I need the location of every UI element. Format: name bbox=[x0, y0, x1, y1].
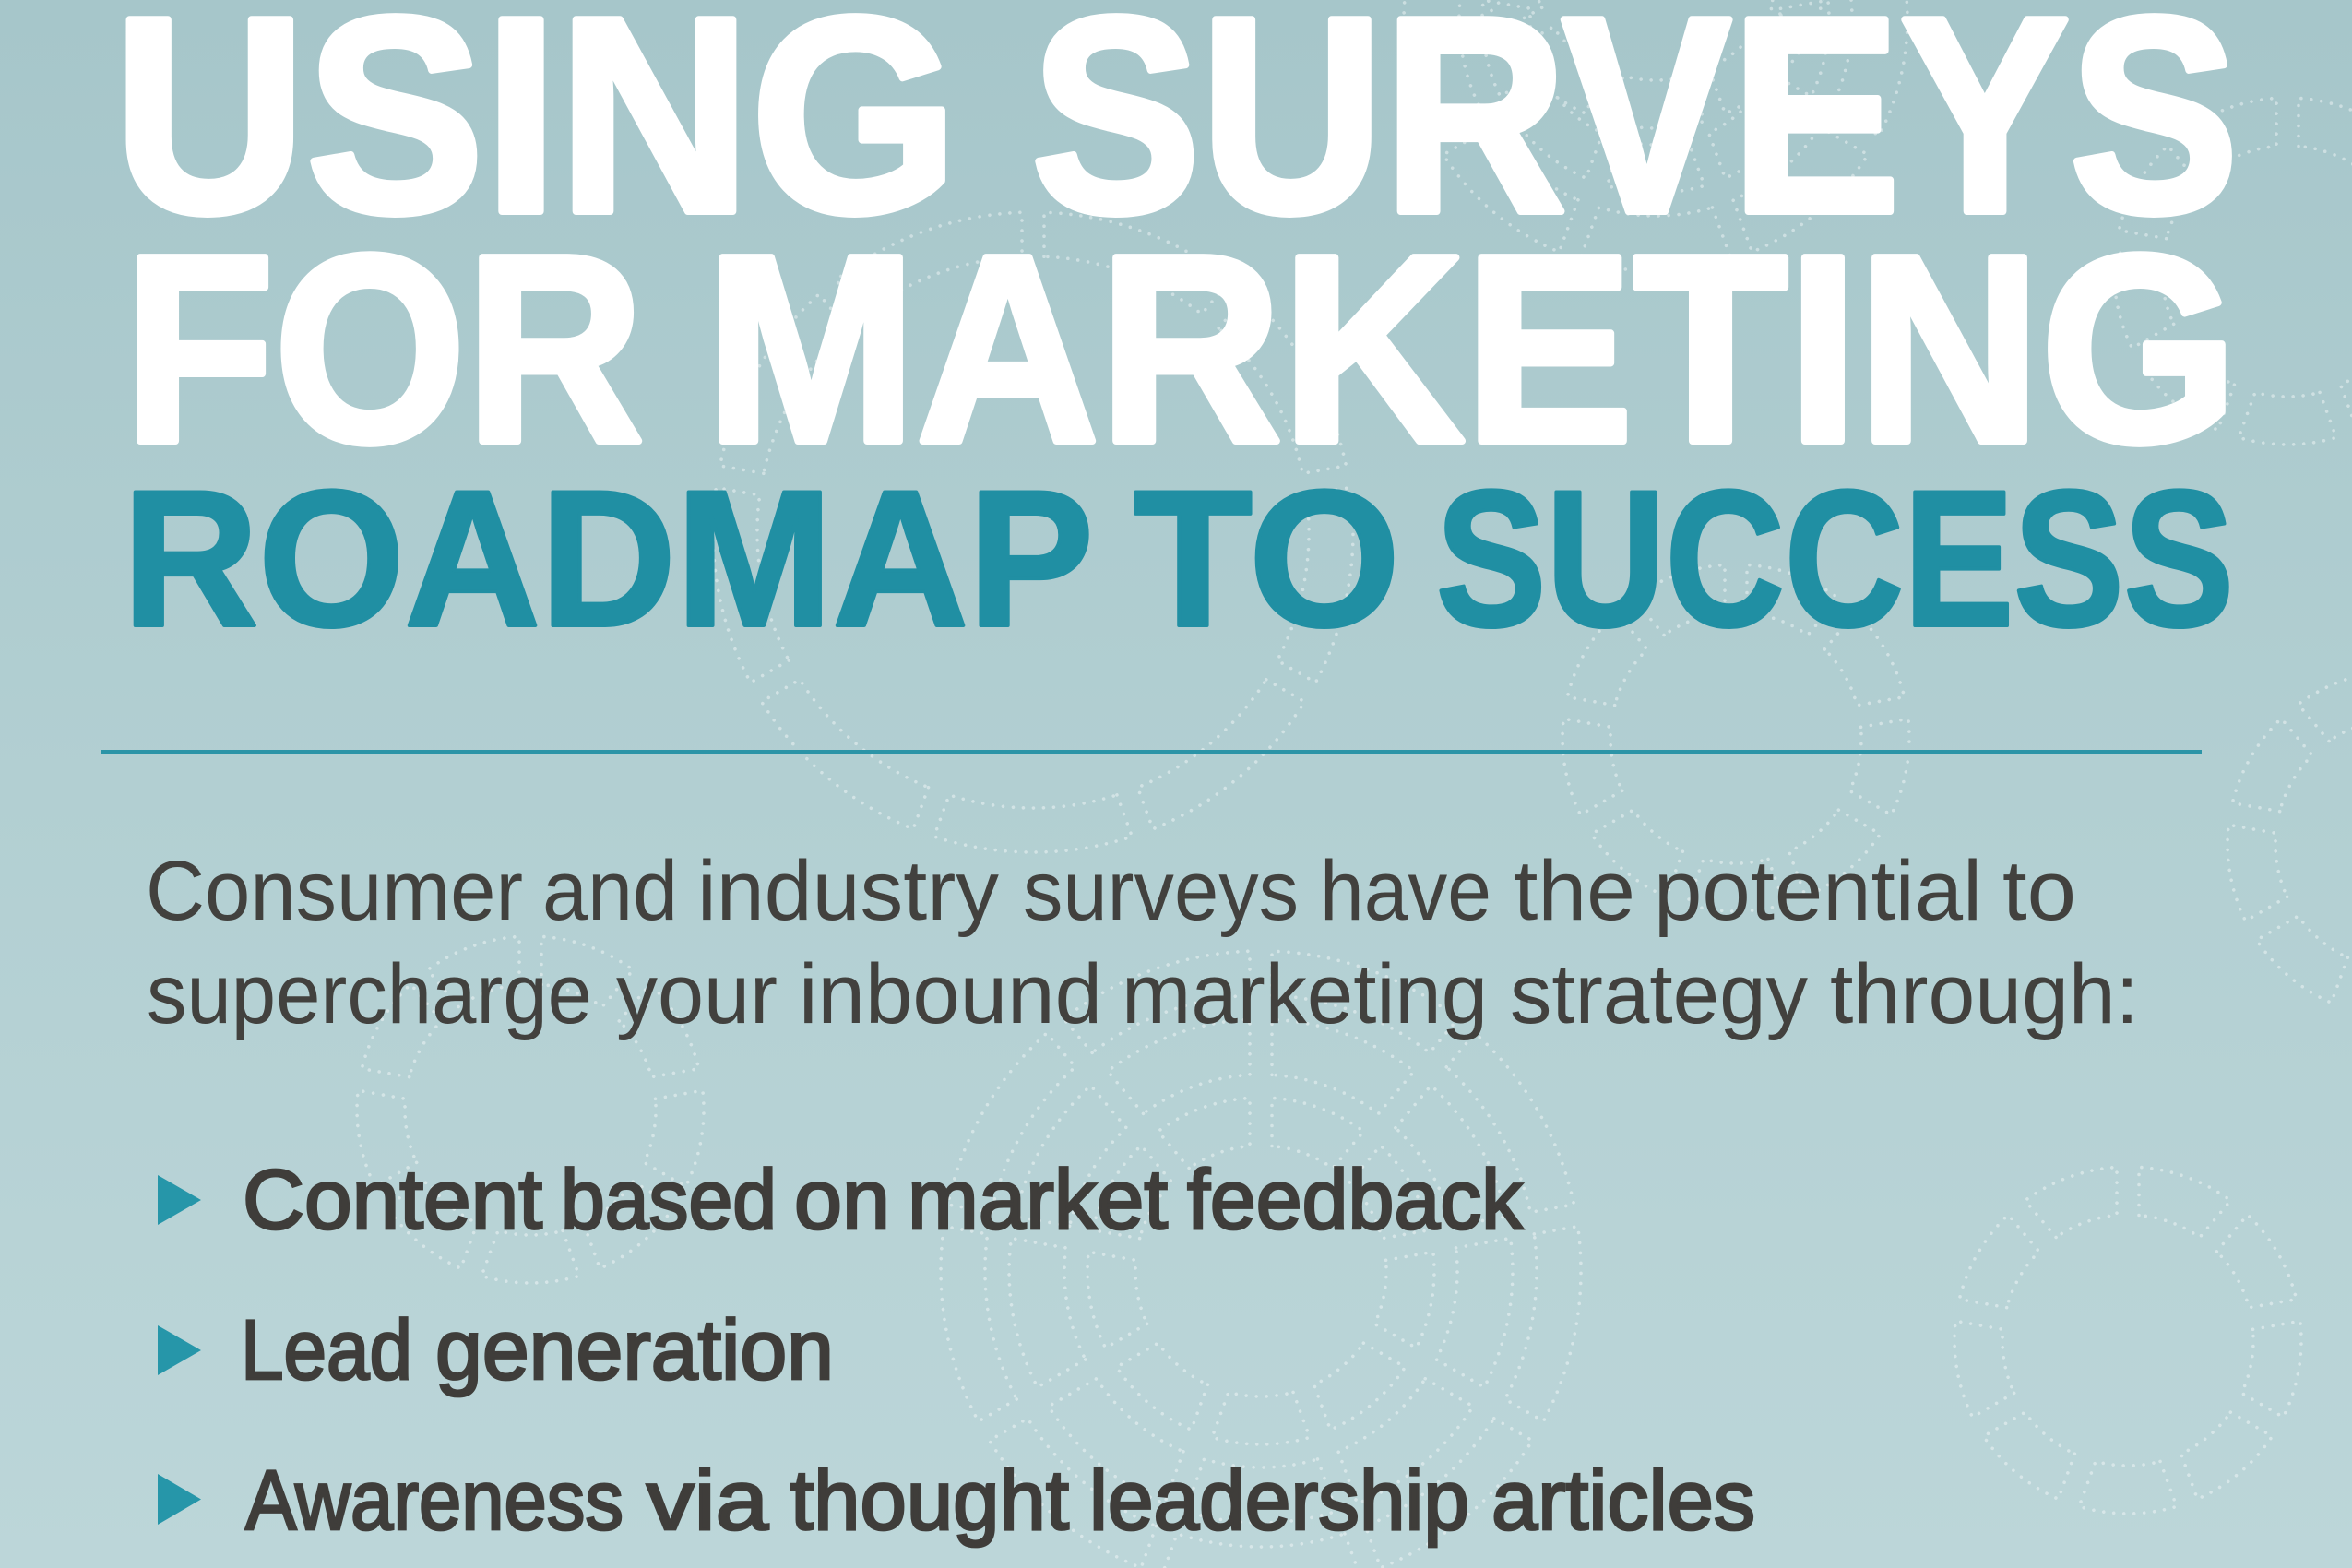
bullet text 3: articles bbox=[1491, 1454, 1755, 1548]
bullet text 2: Lead bbox=[241, 1303, 412, 1397]
intro line 1: potential bbox=[1654, 844, 1982, 938]
intro line 1: surveys bbox=[1023, 844, 1299, 938]
title line 2: FOR bbox=[124, 200, 644, 498]
bullet text 1: market bbox=[908, 1153, 1168, 1247]
intro line 2: strategy bbox=[1510, 947, 1808, 1041]
intro line 1: the bbox=[1514, 844, 1635, 938]
divider rule bbox=[101, 750, 2202, 754]
bullet text 3: thought bbox=[790, 1454, 1069, 1548]
bullet text 1: based bbox=[561, 1153, 777, 1247]
bullet text 1: feedback bbox=[1187, 1153, 1524, 1247]
intro line 1: industry bbox=[697, 844, 999, 938]
intro line 2: through: bbox=[1830, 947, 2139, 1041]
bullet item 1 bbox=[158, 1153, 1524, 1247]
intro line 1: to bbox=[2002, 844, 2076, 938]
intro line 2: supercharge bbox=[147, 947, 592, 1041]
title line 2: MARKETING bbox=[706, 200, 2238, 498]
bullet list bbox=[158, 1153, 1755, 1548]
bullet text 1: on bbox=[794, 1153, 890, 1247]
bullet text 3: via bbox=[647, 1454, 769, 1548]
intro line 1: Consumer bbox=[146, 844, 523, 938]
intro paragraph bbox=[146, 844, 2139, 1041]
intro line 1: have bbox=[1320, 844, 1491, 938]
intro line 2: inbound bbox=[799, 947, 1102, 1041]
intro line 2: marketing bbox=[1122, 947, 1488, 1041]
intro line 2: your bbox=[616, 947, 778, 1041]
bullet text 3: leadership bbox=[1089, 1454, 1469, 1548]
icon: triangle bullet bbox=[158, 1325, 201, 1375]
title bbox=[113, 0, 2239, 667]
intro line 1: and bbox=[542, 844, 678, 938]
icon: triangle bullet bbox=[158, 1474, 201, 1525]
subtitle: ROADMAP bbox=[123, 450, 1090, 667]
bullet text 1: Content bbox=[243, 1153, 542, 1247]
bullet item 3 bbox=[158, 1454, 1755, 1548]
subtitle: SUCCESS bbox=[1436, 450, 2234, 667]
bullet text 3: Awareness bbox=[245, 1454, 624, 1548]
bullet text 2: generation bbox=[435, 1303, 834, 1397]
bullet item 2 bbox=[158, 1303, 834, 1397]
subtitle: TO bbox=[1134, 450, 1400, 667]
icon: triangle bullet bbox=[158, 1175, 201, 1225]
